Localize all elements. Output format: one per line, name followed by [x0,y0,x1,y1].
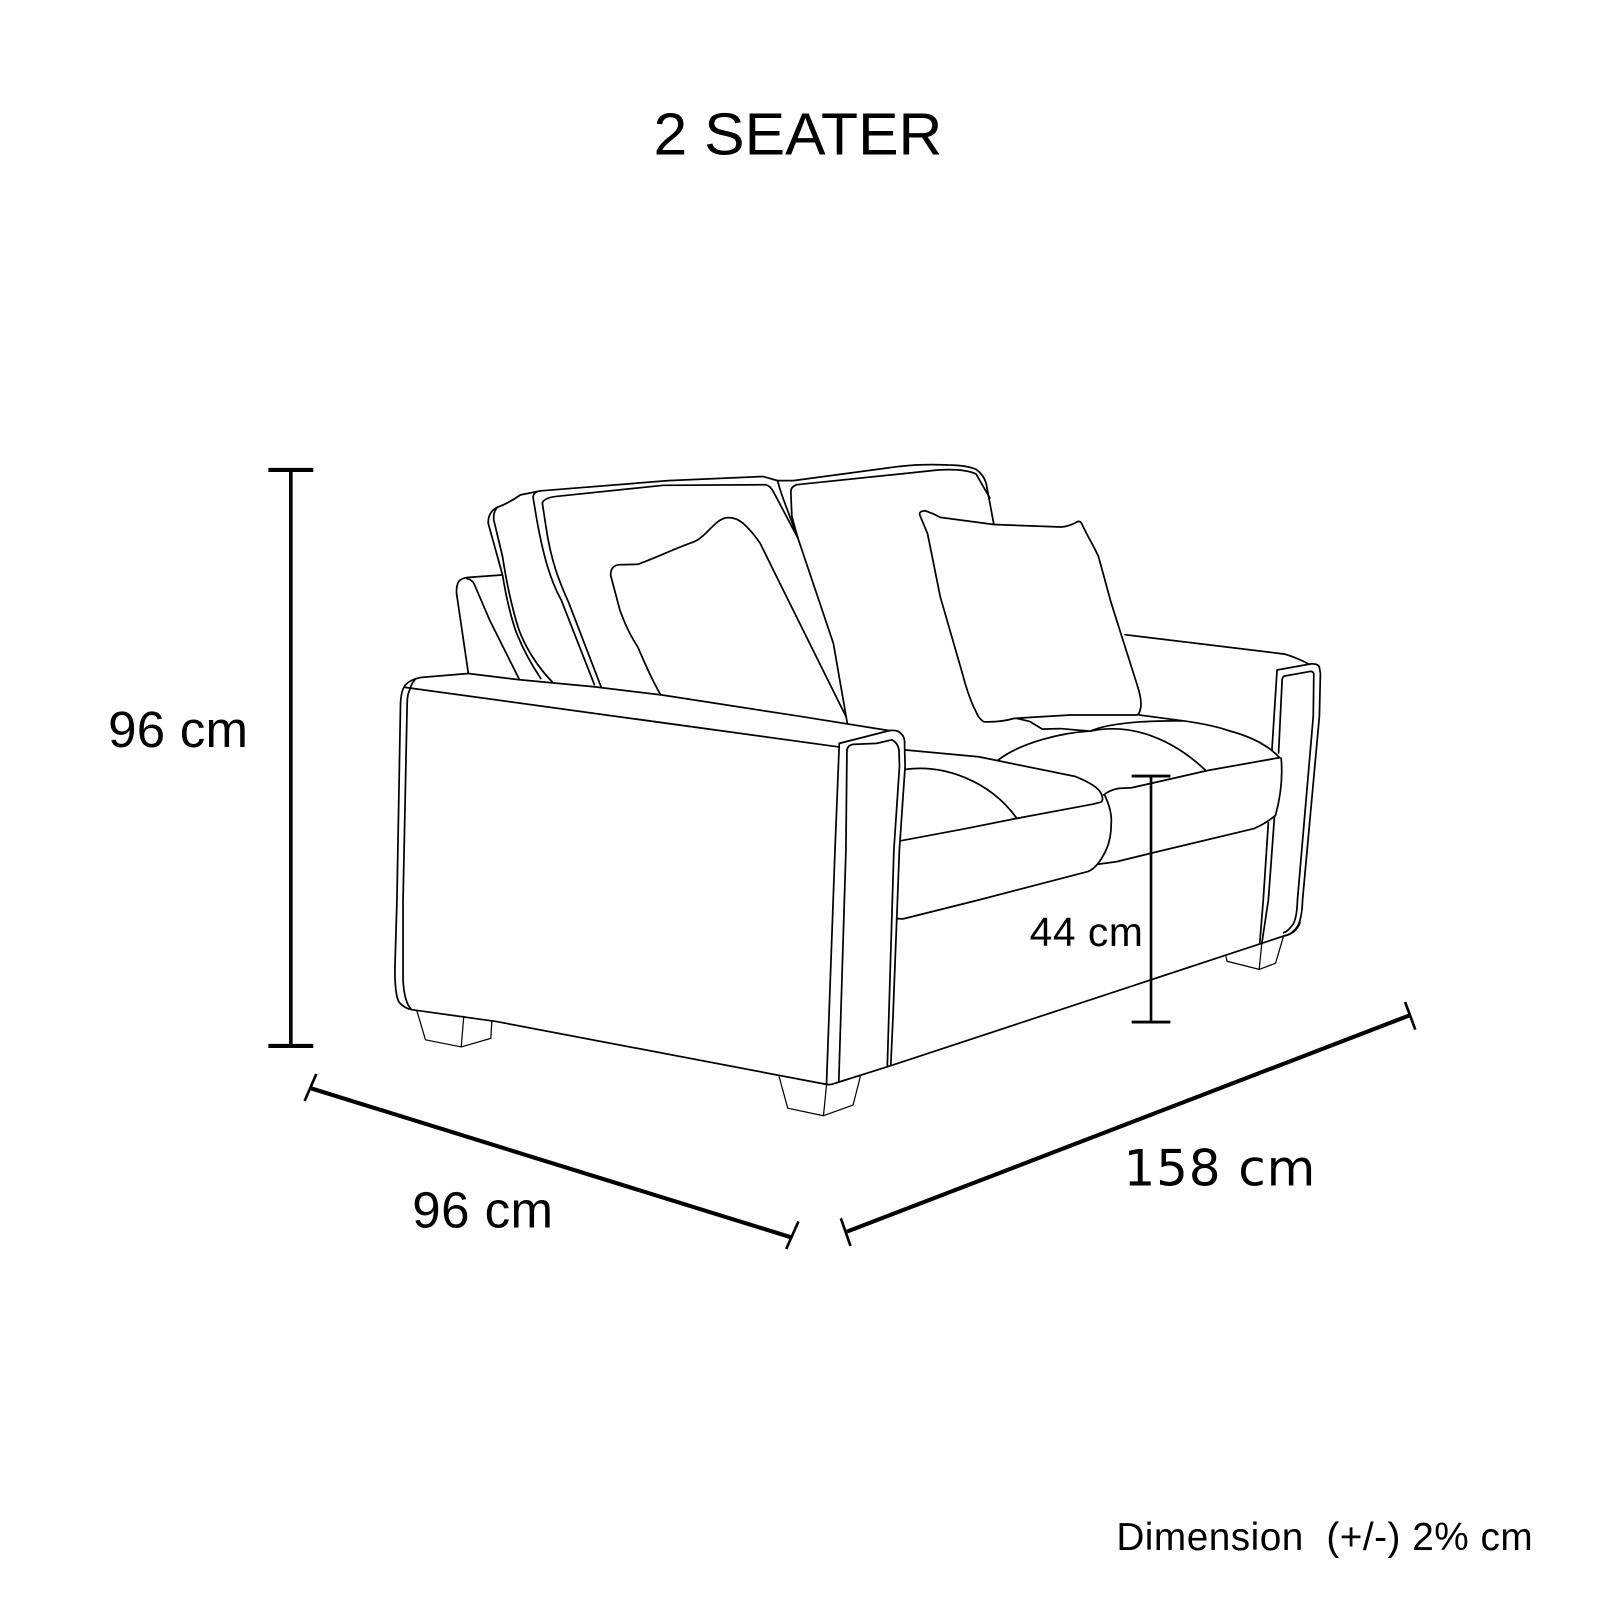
width dimension: 158 cm: 158 cm [1123,1140,1315,1198]
sofa legs [417,936,1284,1116]
far right arm [1125,635,1320,944]
right throw pillow [920,511,1141,722]
tolerance note: Dimension (+/-) 2% cm [1116,1516,1533,1559]
near arm [395,673,1300,1085]
height dimension: 96 cm: 96 cm [108,701,248,758]
title: 2 SEATER [654,101,942,168]
right back cushion [791,465,994,538]
sofa line drawing [395,465,1320,1116]
depth dimension: 96 cm [305,1074,798,1249]
left throw pillow [611,518,846,716]
seat cushions [897,715,1282,919]
far arm behind the back cushion [457,575,519,679]
left back cushion [488,466,900,723]
width dimension: 158 cm [841,1002,1415,1246]
seat height dimension: 44 cm: 44 cm [1030,909,1143,955]
depth dimension: 96 cm: 96 cm [412,1182,553,1239]
